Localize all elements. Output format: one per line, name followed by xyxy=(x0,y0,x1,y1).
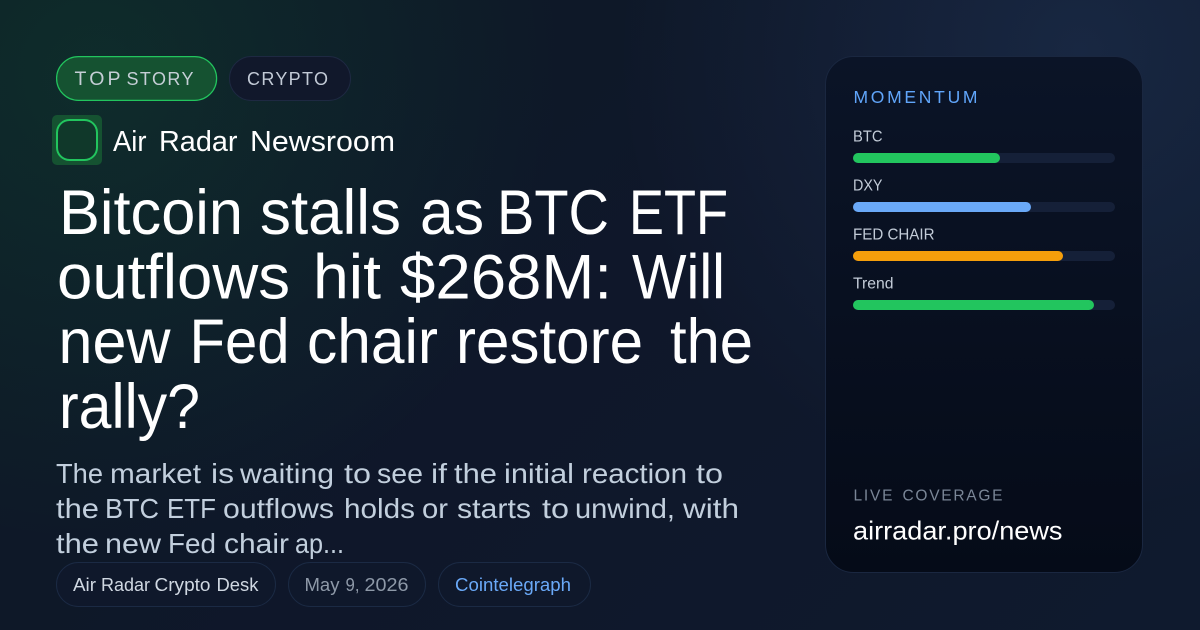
bar row: DXY xyxy=(853,178,1115,212)
summary: initial xyxy=(504,458,574,489)
tag: top story: STORY xyxy=(126,69,194,89)
headline: the xyxy=(670,307,753,377)
meta: source: Cointelegraph xyxy=(455,575,571,595)
summary: market xyxy=(110,458,201,489)
meta: author xyxy=(56,562,276,606)
brand name: Radar xyxy=(159,126,238,158)
summary: the xyxy=(56,528,99,559)
meta: author: Radar xyxy=(101,575,150,595)
summary: ETF xyxy=(167,493,216,524)
meta: date xyxy=(288,562,426,606)
bar row: Trend: Trend xyxy=(853,276,894,292)
summary: see xyxy=(377,458,423,489)
brand name xyxy=(113,126,395,158)
label: live coverage: LIVE xyxy=(854,488,892,504)
summary: to xyxy=(696,458,723,489)
summary: the xyxy=(454,458,497,489)
meta: date: 9, xyxy=(346,575,360,595)
headline: restore xyxy=(456,307,643,377)
summary: with xyxy=(682,493,739,524)
headline: rally? xyxy=(59,372,200,442)
summary xyxy=(56,458,739,559)
tag: top story xyxy=(57,57,217,100)
summary: starts xyxy=(457,493,531,524)
headline: BTC xyxy=(497,178,609,248)
headline xyxy=(57,178,753,442)
site url: airradar.pro/news xyxy=(853,516,1062,546)
meta: date: 2026 xyxy=(364,575,408,595)
summary: BTC xyxy=(105,493,159,524)
summary: to xyxy=(542,493,569,524)
summary: ap... xyxy=(295,528,344,559)
bar row: Trend xyxy=(853,276,1115,310)
headline: new xyxy=(58,307,171,377)
headline: chair xyxy=(307,307,438,377)
headline: Will xyxy=(632,242,725,312)
meta: author: Crypto xyxy=(154,575,210,595)
label: live coverage: COVERAGE xyxy=(902,488,1002,504)
headline: $268M: xyxy=(400,242,612,312)
headline: ETF xyxy=(629,178,728,248)
summary: waiting xyxy=(239,458,334,489)
meta: author: Desk xyxy=(216,575,260,595)
headline: Bitcoin xyxy=(59,178,243,248)
summary: to xyxy=(344,458,371,489)
meta: author: Air xyxy=(73,575,96,595)
summary: outflows xyxy=(223,493,334,524)
tag: crypto: CRYPTO xyxy=(247,69,328,89)
brand name: Newsroom xyxy=(250,126,395,158)
tag: top story: TOP xyxy=(74,68,120,90)
bar row: BTC xyxy=(853,128,1115,163)
summary: unwind, xyxy=(575,493,675,524)
meta: source xyxy=(438,562,590,606)
headline: stalls xyxy=(260,178,401,248)
summary: new xyxy=(105,528,162,559)
headline: outflows xyxy=(57,242,290,312)
summary: Fed xyxy=(168,528,216,559)
summary: chair xyxy=(224,528,289,559)
panel: momentum xyxy=(826,56,1142,572)
brand name: Air xyxy=(113,126,147,158)
bar row: FED CHAIR xyxy=(853,226,1115,261)
summary: The xyxy=(56,458,103,489)
headline: hit xyxy=(313,242,381,312)
summary: reaction xyxy=(582,458,687,489)
summary: or xyxy=(422,493,448,524)
bar row: BTC: BTC xyxy=(853,128,882,146)
tag: crypto xyxy=(230,56,350,100)
headline: as xyxy=(420,178,484,248)
summary: the xyxy=(56,493,99,524)
icon: brand mark xyxy=(52,115,102,165)
panel heading: MOMENTUM xyxy=(854,87,978,107)
label: live coverage xyxy=(854,488,1002,504)
meta: date: May xyxy=(304,575,340,595)
summary: holds xyxy=(344,493,415,524)
bar row: DXY: DXY xyxy=(853,178,882,194)
bar row: FED CHAIR: FED CHAIR xyxy=(853,226,934,244)
summary: if xyxy=(431,458,447,489)
headline: Fed xyxy=(190,307,290,377)
summary: is xyxy=(211,458,234,489)
